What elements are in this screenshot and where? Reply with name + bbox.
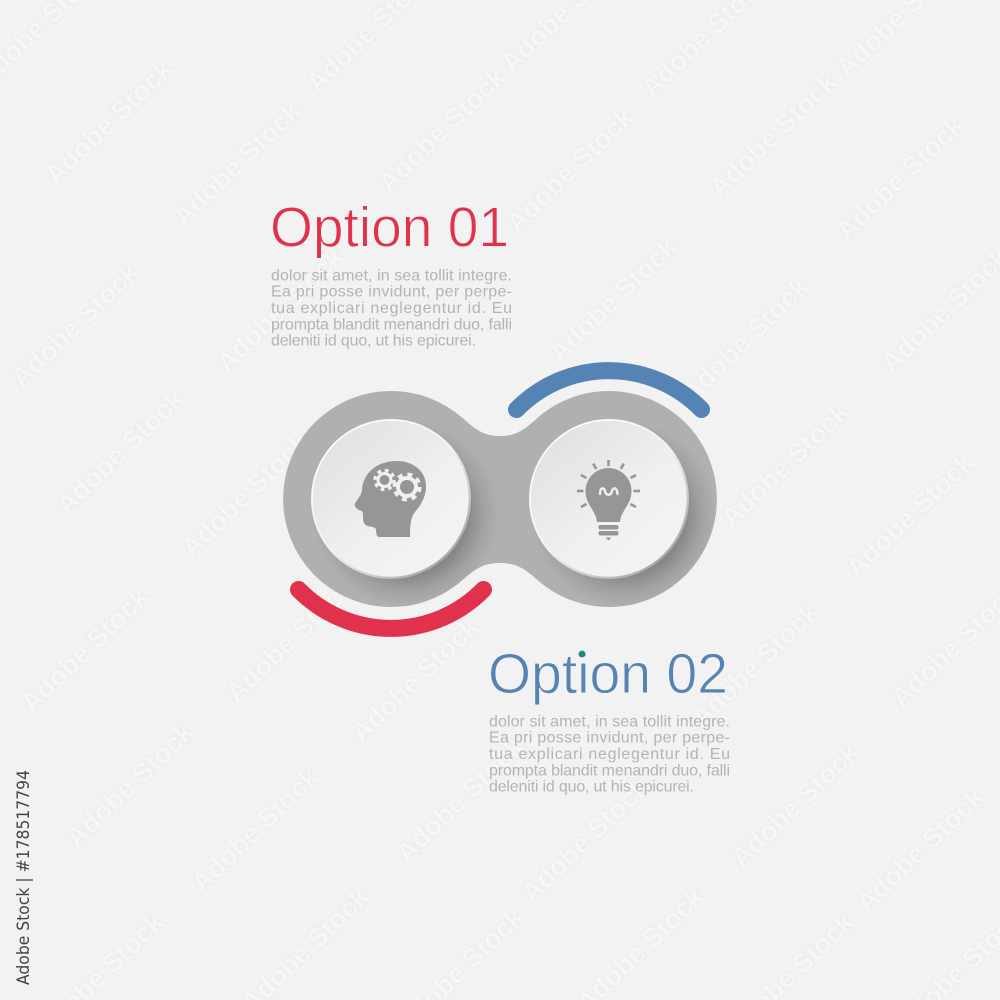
watermark pattern: Adobe Stock [543, 231, 683, 368]
watermark pattern: Adobe Stock [830, 109, 970, 246]
text block: Option 01 description: deleniti id quo, ut his epicurei. [271, 332, 476, 350]
watermark pattern: Adobe Stock [725, 736, 865, 873]
watermark pattern: Adobe Stock [210, 241, 350, 378]
watermark pattern: Adobe Stock [685, 596, 825, 733]
text block: Option 01 description: tua explicari neglegentur id. Eu [271, 300, 512, 317]
watermark pattern: Adobe Stock [840, 446, 980, 583]
heading: Option 01: Option 01 [270, 196, 509, 260]
watermark pattern: Adobe Stock [167, 95, 307, 232]
watermark pattern: Adobe Stock [703, 66, 843, 203]
watermark pattern: Adobe Stock [515, 771, 655, 908]
watermark pattern: Adobe Stock [60, 716, 200, 853]
text block: Option 01 description: Ea pri posse invidunt, per perpe- [271, 284, 512, 300]
bulb base [598, 525, 618, 540]
icon: light bulb [577, 460, 640, 540]
watermark pattern: Adobe Stock [715, 396, 855, 533]
stock credit vertical text: Adobe Stock | #178517794 [14, 770, 34, 985]
disc: right [529, 419, 689, 579]
watermark pattern: Adobe Stock [185, 761, 325, 898]
watermark pattern: Adobe Stock [39, 53, 179, 190]
watermark pattern: Adobe Stock [372, 61, 512, 198]
watermark pattern: Adobe Stock [345, 611, 485, 748]
watermark pattern: Adobe Stock [50, 383, 190, 520]
watermark pattern: Adobe Stock [220, 571, 360, 708]
heading: Option 02: Option 02 [488, 642, 728, 706]
arc: blue [516, 371, 702, 410]
watermark pattern: Adobe Stock [500, 101, 640, 238]
icon: head with gears [355, 461, 426, 537]
soft shadows of discs [331, 438, 716, 606]
watermark pattern: Adobe Stock [675, 271, 815, 408]
text block: Option 02 description: prompta blandit menandri duo, falli [489, 762, 730, 780]
grey blob [283, 391, 717, 607]
large gear [394, 474, 420, 500]
watermark pattern: Adobe Stock [390, 731, 530, 868]
watermark pattern: Adobe Stock [15, 581, 155, 718]
watermark pattern: Adobe Stock [175, 426, 315, 563]
text block: Option 02 description: Ea pri posse invidunt, per perpe- [489, 730, 730, 746]
text block: Option 01 description: dolor sit amet, in sea tollit integre. [271, 268, 512, 284]
watermark pattern: Adobe Stock [5, 256, 145, 393]
small gear [375, 470, 394, 490]
text block: Option 01 description [271, 268, 512, 350]
disc: left [311, 419, 471, 579]
text block: Option 01 description: prompta blandit menandri duo, falli [271, 316, 512, 334]
bulb filament [600, 488, 618, 495]
panel: connected infinity shape [283, 391, 717, 607]
text block: Option 02 description: dolor sit amet, in sea tollit integre. [489, 714, 730, 730]
arc: red [298, 590, 484, 628]
bulb rays [577, 460, 640, 507]
text block: Option 02 description: tua explicari neglegentur id. Eu [489, 746, 730, 763]
text block: Option 02 description [489, 714, 730, 796]
text block: Option 02 description: deleniti id quo, ut his epicurei. [489, 778, 694, 796]
watermark pattern: Adobe Stock [850, 781, 990, 918]
